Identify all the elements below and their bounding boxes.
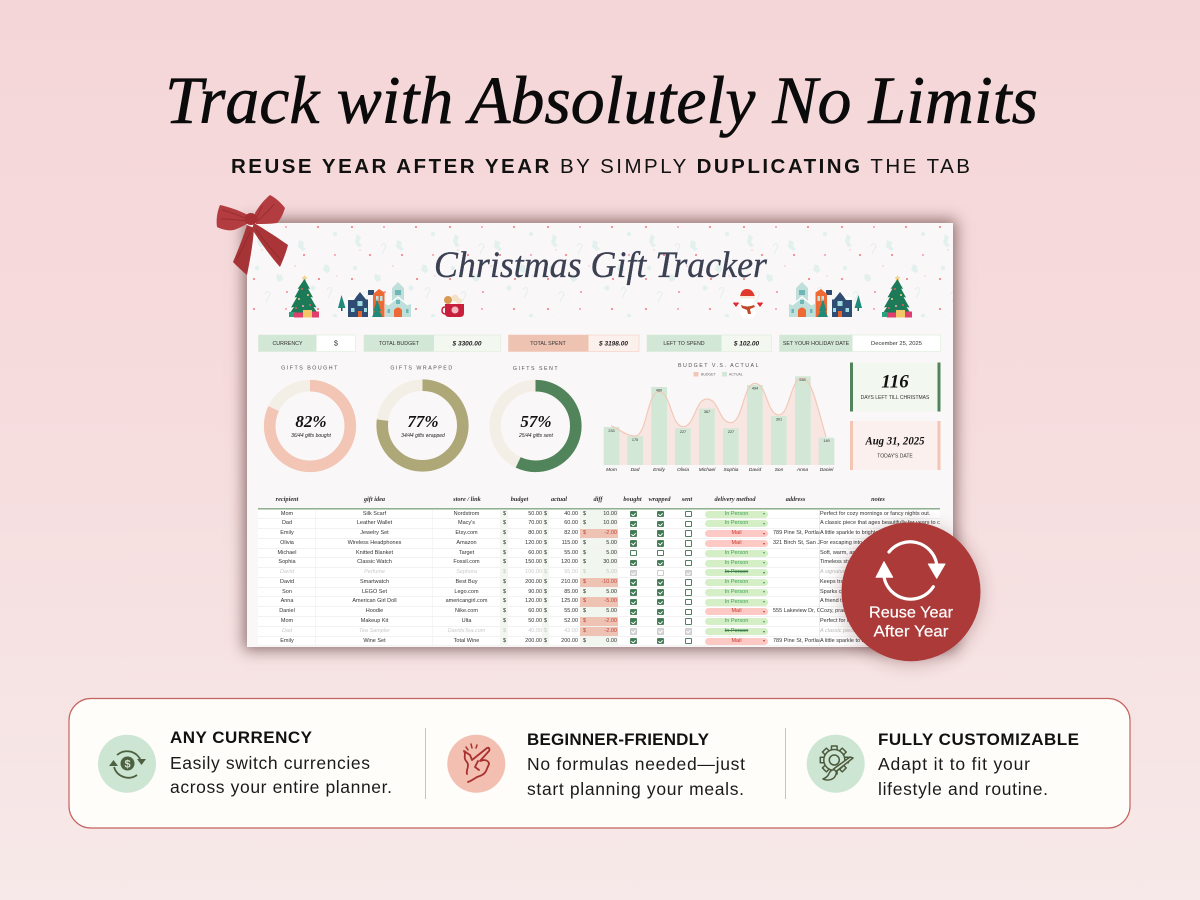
bar values — [608, 378, 830, 443]
gift table: Wireless Headphones — [348, 540, 401, 546]
icon: christmas tree right — [882, 275, 912, 318]
bar values: 494 — [752, 386, 758, 390]
gift table: $ — [503, 540, 506, 546]
gift table: Son — [282, 589, 292, 595]
gift table: 200.00 — [525, 579, 542, 585]
icon: snowman — [733, 289, 763, 319]
benefit: fully customizable: FULLY CUSTOMIZABLE — [878, 730, 1079, 749]
gift table: $ — [503, 520, 506, 526]
donut: gifts bought: 82% — [295, 412, 327, 431]
gift table: Keeps track of every step — [820, 579, 882, 585]
bar values: 227 — [728, 430, 734, 434]
badge text: Reuse Year — [869, 604, 954, 622]
gift table: 40.00 — [564, 510, 578, 516]
bar chart: budget vs actual — [604, 363, 834, 473]
gift table: 50.00 — [528, 510, 542, 516]
icon: currency exchange: $ — [124, 758, 131, 770]
icon: christmas tree left — [289, 275, 319, 318]
gift table: Sophia — [278, 559, 296, 565]
table headers: store / link — [452, 496, 482, 503]
card: days left: DAYS LEFT TILL CHRISTMAS — [861, 395, 930, 401]
gift table: 120.00 — [525, 540, 542, 546]
gift table: Emily — [280, 638, 294, 644]
benefit: fully customizable: Adapt it to fit your — [878, 754, 1030, 774]
benefit: fully customizable: lifestyle and routine. — [878, 779, 1048, 799]
gift table: Emily — [280, 530, 294, 536]
icon: snapping fingers — [447, 735, 505, 793]
gift table: $ — [583, 559, 586, 565]
gift table: $ — [503, 559, 506, 565]
gift table: $ — [544, 530, 547, 536]
bar names: Michael — [699, 467, 716, 473]
gift table: 125.00 — [561, 598, 578, 604]
gift table: 70.00 — [528, 520, 542, 526]
gift table: Total Wine — [454, 638, 479, 644]
gift table: Olivia — [280, 540, 294, 546]
table headers: bought — [623, 496, 642, 503]
panel: benefits — [69, 698, 1130, 828]
gift table: $ — [583, 638, 586, 644]
gift table: American Girl Doll — [352, 598, 397, 604]
bar values: 480 — [656, 388, 662, 392]
gift table: $ — [544, 550, 547, 556]
chart legend: BUDGET — [701, 372, 716, 376]
gift table: Sephora — [456, 569, 477, 575]
gift table: $ — [503, 589, 506, 595]
gift table: $ — [583, 618, 586, 624]
gift table: Sparks creativity for hours — [820, 589, 884, 595]
gift table: -2.00 — [604, 618, 617, 624]
gift table: $ — [503, 638, 506, 644]
gift table: Cozy, practical, and stylish — [820, 608, 885, 614]
benefit: beginner-friendly: BEGINNER-FRIENDLY — [527, 730, 710, 749]
gift table: $ — [544, 589, 547, 595]
gift table: Tea Sampler — [359, 628, 390, 634]
table headers: wrapped — [648, 496, 671, 503]
gift table: Perfume — [364, 569, 385, 575]
benefit: any currency: across your entire planner. — [170, 777, 392, 797]
gift table: In Person — [725, 618, 748, 624]
gift table: Best Buy — [455, 579, 478, 585]
gift table: 10.00 — [603, 510, 617, 516]
KPI: left to spend: $ 102.00 — [733, 340, 760, 348]
benefit: beginner-friendly: start planning your meals. — [527, 779, 744, 799]
gift table: 30.00 — [603, 559, 617, 565]
gift table: $ — [583, 540, 586, 546]
benefit: fully customizable — [807, 730, 1079, 799]
gift table: -5.00 — [604, 598, 617, 604]
gift table: 200.00 — [561, 638, 578, 644]
gift table: $ — [544, 540, 547, 546]
gift table: DavidsTea.com — [448, 628, 485, 634]
icon: red ribbon bow — [217, 195, 288, 275]
KPI: currency: CURRENCY — [272, 341, 303, 347]
gift table: 5.00 — [606, 608, 617, 614]
donut: gifts sent — [495, 366, 576, 466]
gift table: $ — [503, 608, 506, 614]
gift table: 90.00 — [528, 589, 542, 595]
gift table: A little sparkle to brighten her everyday — [820, 530, 915, 536]
bar values: 301 — [776, 418, 782, 422]
gift table: Soft, warm, and perfect for winter — [820, 550, 901, 556]
icon: gear and brush — [807, 735, 865, 793]
card: days left — [850, 362, 940, 412]
bar values: 233 — [608, 429, 615, 433]
table headers: notes — [871, 496, 885, 503]
donut: gifts wrapped — [382, 366, 463, 466]
donut: gifts sent: 25/44 gifts sent — [518, 433, 554, 439]
bar names: Daniel — [820, 467, 834, 473]
subtitle: REUSE YEAR AFTER YEAR BY SIMPLY DUPLICATING THE TAB — [231, 155, 970, 178]
gift table: A little sparkle to brighten her evening — [820, 638, 912, 644]
gift table: 82.00 — [564, 530, 578, 536]
panel: spreadsheet sheet background — [247, 222, 953, 647]
gift table: 5.00 — [606, 550, 617, 556]
gift table: 200.00 — [525, 638, 542, 644]
gift table: In Person — [725, 579, 748, 585]
KPI: total budget: TOTAL BUDGET — [379, 341, 420, 347]
gift table: Mail — [731, 638, 742, 644]
table headers: budget — [511, 496, 528, 503]
gift table: $ — [503, 569, 506, 575]
table headers: delivery method — [714, 496, 756, 503]
donut: gifts bought: GIFTS BOUGHT — [281, 366, 339, 372]
KPI: total budget: $ 3300.00 — [452, 340, 482, 348]
gift table: 50.00 — [528, 618, 542, 624]
gift table: $ — [544, 510, 547, 516]
dashboard contents — [253, 226, 953, 510]
bar values: 149 — [823, 439, 830, 443]
bar names: David — [749, 467, 761, 473]
gift table: $ — [583, 589, 586, 595]
card: days left: 116 — [881, 372, 909, 393]
benefit: any currency — [98, 728, 392, 797]
gift table: 210.00 — [561, 579, 578, 585]
gift table: americangirl.com — [446, 598, 487, 604]
sheet title: Christmas Gift Tracker — [434, 245, 768, 286]
donut: gifts wrapped: GIFTS WRAPPED — [390, 366, 454, 372]
gift table: In Person — [725, 599, 748, 605]
gift table: $ — [544, 628, 547, 634]
gift table: In Person — [725, 628, 748, 634]
card: today's date — [850, 421, 940, 470]
KPI: total spent — [508, 335, 639, 352]
bar values: 367 — [704, 410, 710, 414]
chart legend — [694, 372, 743, 376]
gift table: Lego.com — [454, 589, 479, 595]
gift table: In Person — [725, 569, 748, 575]
gift table: 5.00 — [606, 589, 617, 595]
benefit: beginner-friendly: No formulas needed—just — [527, 754, 745, 774]
gift table: 95.00 — [564, 569, 578, 575]
gift table: -10.00 — [601, 579, 617, 585]
bars — [604, 376, 834, 465]
gift table: $ — [503, 598, 506, 604]
chart legend: ACTUAL — [729, 372, 743, 376]
gift table: Michael — [278, 550, 296, 556]
gift table: Makeup Kit — [361, 618, 388, 624]
card: today's date: TODAY'S DATE — [877, 454, 913, 460]
gift table: In Person — [725, 511, 748, 517]
gift table: David — [280, 579, 294, 585]
KPI: currency — [258, 335, 356, 352]
gift table: Perfect for date nights out — [820, 618, 883, 624]
gift table: $ — [544, 569, 547, 575]
KPI: holiday date: SET YOUR HOLIDAY DATE — [783, 341, 850, 347]
gift table: Daniel — [279, 608, 295, 614]
donut: gifts bought: 36/44 gifts bought — [291, 433, 331, 439]
gift table: Mail — [731, 540, 742, 546]
KPI: holiday date — [780, 335, 940, 352]
donut: gifts wrapped: 77% — [407, 412, 439, 431]
gift table: Dad — [282, 628, 292, 634]
gift table: Anna — [281, 598, 293, 604]
table headers: address — [786, 496, 806, 503]
donut: gifts bought — [270, 366, 350, 466]
gift table: Smartwatch — [360, 579, 389, 585]
header pattern — [247, 222, 953, 317]
gift table: $ — [583, 598, 586, 604]
KPI: left to spend — [647, 335, 772, 352]
table headers: recipient — [276, 496, 299, 503]
gift table: 60.00 — [564, 520, 578, 526]
gift table: 40.00 — [528, 628, 542, 634]
gift table: $ — [583, 608, 586, 614]
gift table: $ — [544, 638, 547, 644]
gift table: Leather Wallet — [357, 520, 392, 526]
gift table: Silk Scarf — [363, 510, 386, 516]
gift table: $ — [503, 579, 506, 585]
gift table: 5.00 — [606, 569, 617, 575]
gift table: $ — [583, 569, 586, 575]
title: Track with Absolutely No Limits — [165, 62, 1038, 138]
KPI: total budget — [364, 335, 500, 352]
gift table: -2.00 — [604, 530, 617, 536]
gift table: LEGO Set — [362, 589, 387, 595]
gift table: A friend to treasure always — [820, 598, 885, 604]
table headers — [276, 496, 885, 503]
bar names — [606, 467, 834, 473]
gift table: Target — [459, 550, 474, 556]
gift table: Jewelry Set — [360, 530, 389, 536]
gift table: $ — [583, 520, 586, 526]
KPI: currency: $ — [334, 340, 338, 348]
gift table: 10.00 — [603, 520, 617, 526]
badge: reuse year after year — [842, 522, 980, 661]
gift table: $ — [503, 628, 506, 634]
gift table: $ — [544, 608, 547, 614]
gift table: Etsy.com — [455, 530, 478, 536]
gift table: $ — [583, 628, 586, 634]
gift table: 120.00 — [561, 559, 578, 565]
bar names: Mom — [606, 467, 617, 473]
chart title: BUDGET V.S. ACTUAL — [678, 363, 760, 369]
KPI: total spent: $ 3198.00 — [598, 340, 628, 348]
bar names: Anna — [796, 467, 808, 473]
gift table: A classic piece for quiet mornings — [820, 628, 902, 634]
gift table: Classic Watch — [357, 559, 392, 565]
KPI: holiday date: December 25, 2025 — [871, 341, 922, 347]
gift table: Macy's — [458, 520, 475, 526]
gift table: Hoodie — [366, 608, 383, 614]
budget line — [611, 378, 826, 437]
bar names: Sophia — [724, 467, 739, 473]
icon: cocoa mug — [442, 294, 464, 317]
gift table: 120.00 — [525, 598, 542, 604]
icon: refresh arrows — [876, 542, 945, 599]
badge shadow — [841, 524, 981, 664]
benefit: any currency: Easily switch currencies — [170, 753, 370, 773]
gift table: $ — [503, 510, 506, 516]
gift table: Fossil.com — [453, 559, 480, 565]
table header rule — [258, 508, 940, 510]
gift table: David — [280, 569, 294, 575]
bar names: Olivia — [677, 467, 689, 473]
icon: currency exchange — [98, 735, 156, 793]
bar values: 175 — [632, 438, 638, 442]
gift table: Ulta — [462, 618, 471, 624]
gift table: 55.00 — [564, 550, 578, 556]
headline block — [165, 62, 1038, 178]
table headers: sent — [681, 496, 692, 503]
gift table: 52.00 — [564, 618, 578, 624]
table headers: gift idea — [363, 496, 385, 503]
benefit: beginner-friendly — [447, 730, 745, 799]
gift table: Perfect for cozy mornings or fancy nights out. — [820, 510, 930, 516]
gift table: A signature scent for every day — [820, 569, 896, 575]
icon: village right — [789, 282, 862, 317]
gift table: 55.00 — [564, 608, 578, 614]
bar values: 227 — [680, 430, 686, 434]
gift table: $ — [544, 618, 547, 624]
gift table: Mom — [281, 510, 293, 516]
gift table: $ — [544, 579, 547, 585]
bar names: Emily — [653, 467, 665, 473]
gift table: Mail — [731, 530, 742, 536]
gift table: Mom — [281, 618, 293, 624]
donut: gifts sent: GIFTS SENT — [513, 366, 559, 372]
gift table: 42.00 — [564, 628, 578, 634]
gift table: -2.00 — [604, 628, 617, 634]
icon: village left — [338, 282, 411, 317]
bar names: Dad — [631, 467, 640, 473]
gift table: $ — [503, 530, 506, 536]
donut: gifts wrapped: 34/44 gifts wrapped — [401, 433, 445, 439]
benefit: any currency: ANY CURRENCY — [170, 728, 313, 747]
card: today's date: Aug 31, 2025 — [865, 434, 924, 448]
gift table: In Person — [725, 560, 748, 566]
gift table: Nike.com — [455, 608, 478, 614]
gift table: Dad — [282, 520, 292, 526]
KPI: total spent: TOTAL SPENT — [530, 341, 567, 347]
gift table: 80.00 — [528, 530, 542, 536]
table headers: actual — [551, 496, 567, 503]
gift table: $ — [583, 530, 586, 536]
gift table: In Person — [725, 550, 748, 556]
gift table: In Person — [725, 520, 748, 526]
gift table: For escaping into her favorite music — [820, 540, 907, 546]
gift table: Knitted Blanket — [356, 550, 393, 556]
gift table: 150.00 — [525, 559, 542, 565]
badge: reuse year after year: After Year — [874, 624, 949, 640]
gift table: Wine Set — [363, 638, 386, 644]
gift table: Amazon — [456, 540, 477, 546]
gift table: Mail — [731, 608, 742, 614]
gift table: $ — [544, 598, 547, 604]
gift table: 100.00 — [525, 569, 542, 575]
KPI: left to spend: LEFT TO SPEND — [663, 341, 705, 347]
donut: gifts sent: 57% — [520, 412, 552, 431]
gift table: $ — [583, 579, 586, 585]
gift table: 60.00 — [528, 608, 542, 614]
gift table: $ — [544, 520, 547, 526]
bar values: 545 — [799, 378, 806, 382]
gift table: In Person — [725, 589, 748, 595]
budget area — [611, 378, 826, 465]
gift table: Timeless style for any occasion — [820, 559, 896, 565]
gift table: 0.00 — [606, 638, 617, 644]
bar names: Son — [775, 467, 784, 473]
gift table: 85.00 — [564, 589, 578, 595]
gift table: Nordstrom — [454, 510, 479, 516]
gift table: $ — [503, 618, 506, 624]
table headers: diff — [594, 496, 603, 503]
gift table: $ — [544, 559, 547, 565]
gift table: 115.00 — [562, 540, 578, 546]
gift table: 60.00 — [528, 550, 542, 556]
gift table: $ — [583, 550, 586, 556]
gift table: $ — [583, 510, 586, 516]
gift table: $ — [503, 550, 506, 556]
gift table: 5.00 — [606, 540, 617, 546]
